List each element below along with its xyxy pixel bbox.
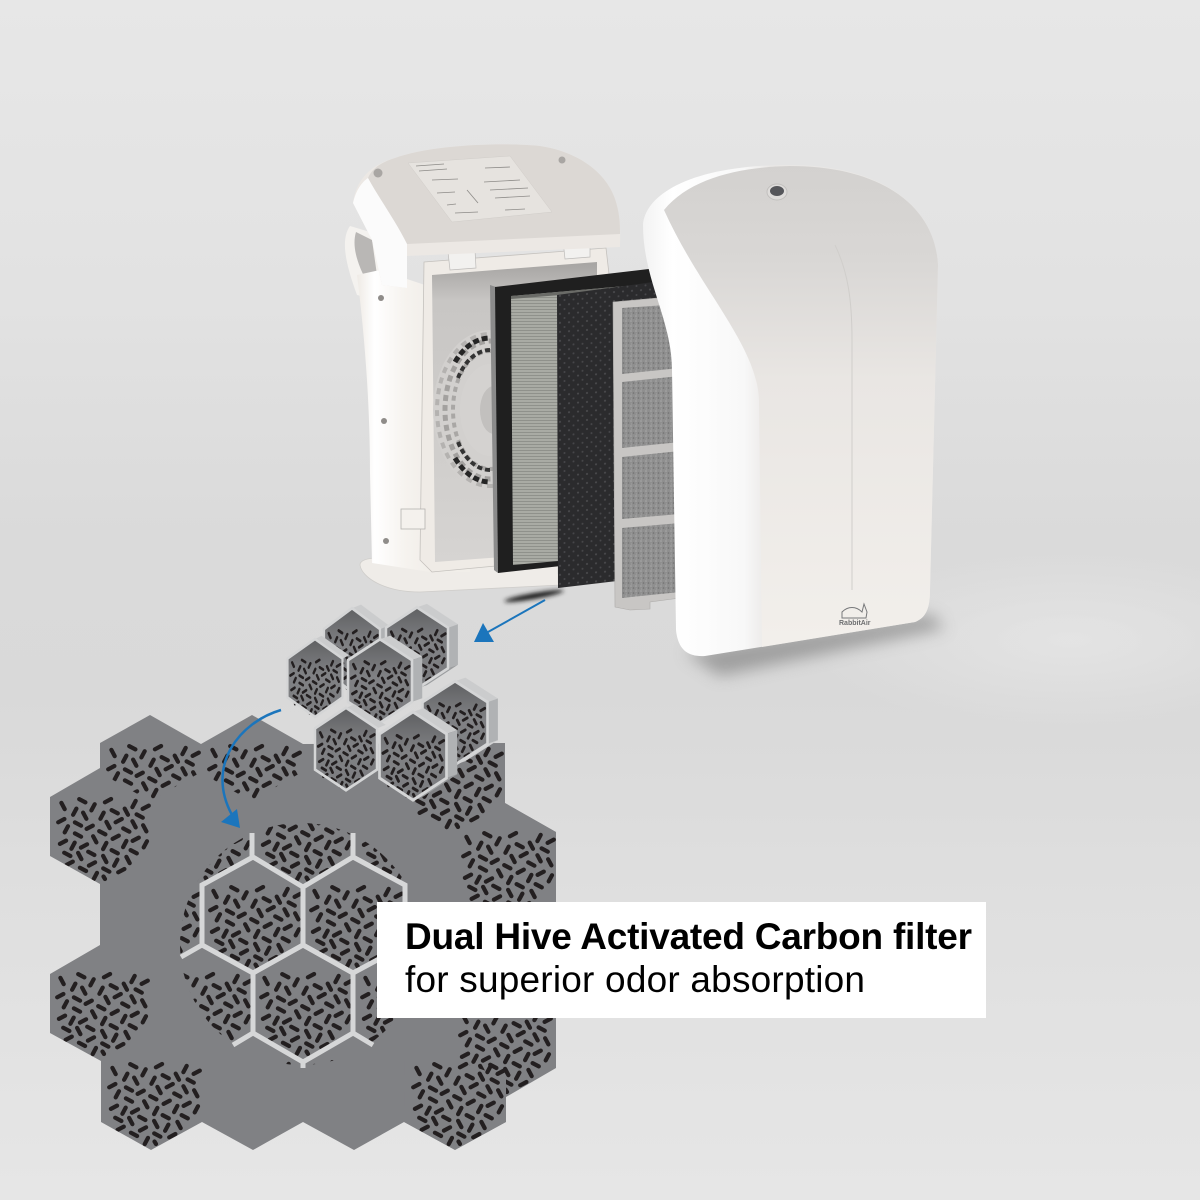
large hive cluster (50, 715, 556, 1150)
carbon pellets in outer hexes (57, 746, 556, 1150)
front frame (420, 248, 612, 572)
caption subheading: for superior odor absorption (405, 959, 865, 1000)
front cover shadow (685, 614, 945, 676)
pre-filter (613, 296, 680, 610)
magnified circle of pellets (180, 823, 402, 1064)
base plate (360, 558, 600, 592)
hex left (288, 636, 349, 717)
caption heading: Dual Hive Activated Carbon filter (405, 916, 972, 957)
hex centre (348, 636, 422, 723)
recess clips (448, 238, 590, 270)
side screws (378, 295, 389, 544)
caption box (377, 902, 986, 1018)
brand logo (839, 604, 871, 627)
handle (345, 226, 382, 300)
blue curved arrow: hive to magnified view (221, 710, 281, 828)
activated carbon filter (557, 280, 668, 588)
inner recess (432, 262, 597, 562)
sensor knob (767, 184, 787, 200)
front cover (643, 165, 938, 656)
blue arrow: filter to hive (474, 600, 545, 642)
hex bottom right (380, 708, 457, 800)
fan grille (433, 330, 547, 490)
brand logo: RabbitAir (839, 620, 871, 627)
top cap (353, 144, 620, 288)
hex right (422, 678, 498, 765)
hex back right (386, 604, 458, 689)
magnified honeycomb lines (181, 833, 405, 1068)
hex bottom left (315, 704, 386, 790)
side body (357, 270, 470, 572)
small hive cluster (288, 604, 498, 800)
hex back left (324, 605, 389, 692)
HEPA filter (490, 268, 660, 573)
control label panel (408, 156, 552, 222)
cover seam (835, 245, 852, 590)
opened air purifier body (345, 144, 620, 592)
shadow under filters (504, 588, 564, 604)
